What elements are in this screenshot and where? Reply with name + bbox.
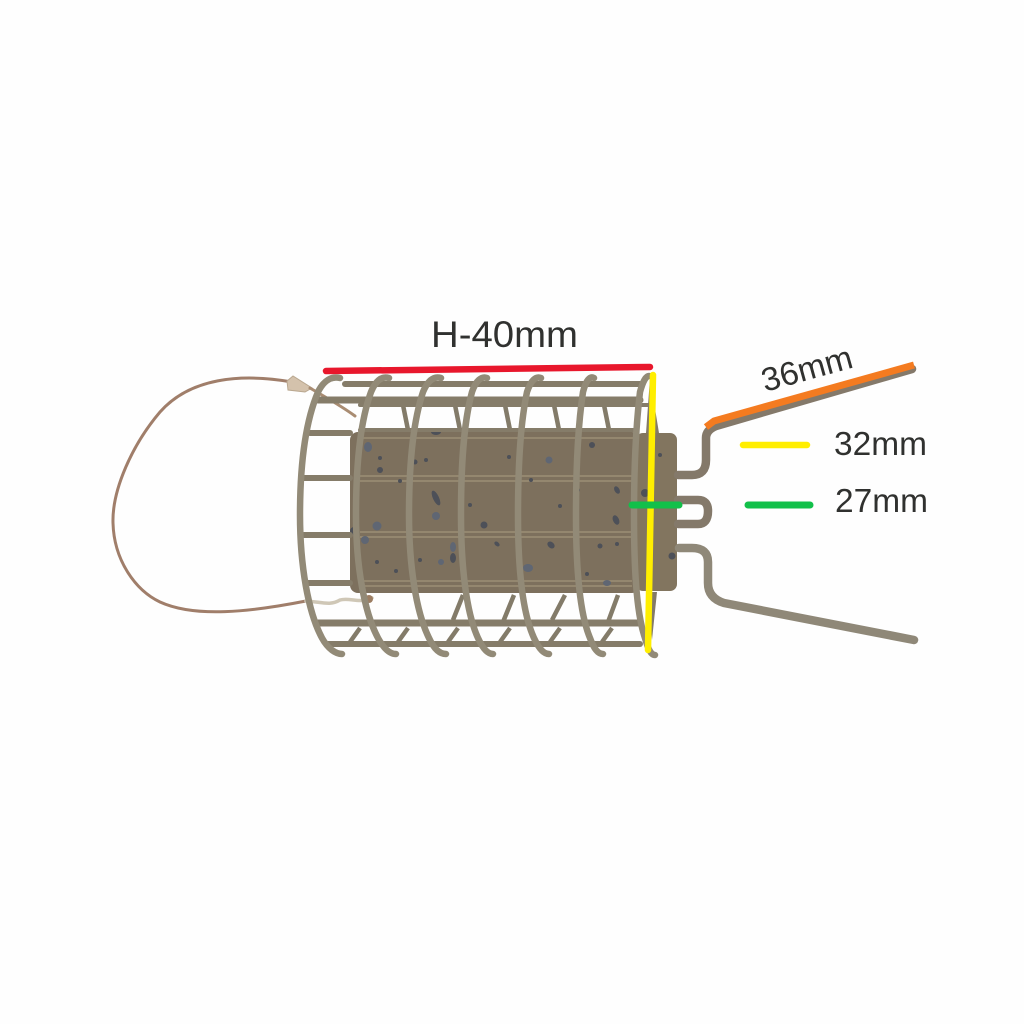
top arm (678, 369, 912, 475)
green measure line: 27mm (632, 502, 679, 508)
horizontal cage bars (304, 384, 648, 644)
label: 36mm: 36mm (757, 338, 856, 399)
middle loop (678, 500, 708, 524)
green legend swatch (748, 502, 810, 508)
back cage struts (350, 405, 618, 642)
cage rings (300, 376, 655, 655)
wire loop handle (113, 376, 373, 612)
label: 32mm: 32mm (834, 425, 927, 462)
body ribs (360, 438, 634, 586)
yellow legend swatch (743, 442, 807, 448)
red measure line: height (326, 367, 650, 371)
label: height 40mm: H-40mm (431, 314, 578, 355)
orange measure line: 36mm (706, 365, 914, 427)
feeder body (350, 378, 677, 640)
bottom arm (679, 548, 914, 640)
right side wire arms (678, 369, 914, 640)
label: 27mm: 27mm (835, 482, 928, 519)
body speckles (350, 429, 676, 586)
yellow measure line: 32mm (648, 375, 653, 650)
end cap (636, 433, 677, 591)
